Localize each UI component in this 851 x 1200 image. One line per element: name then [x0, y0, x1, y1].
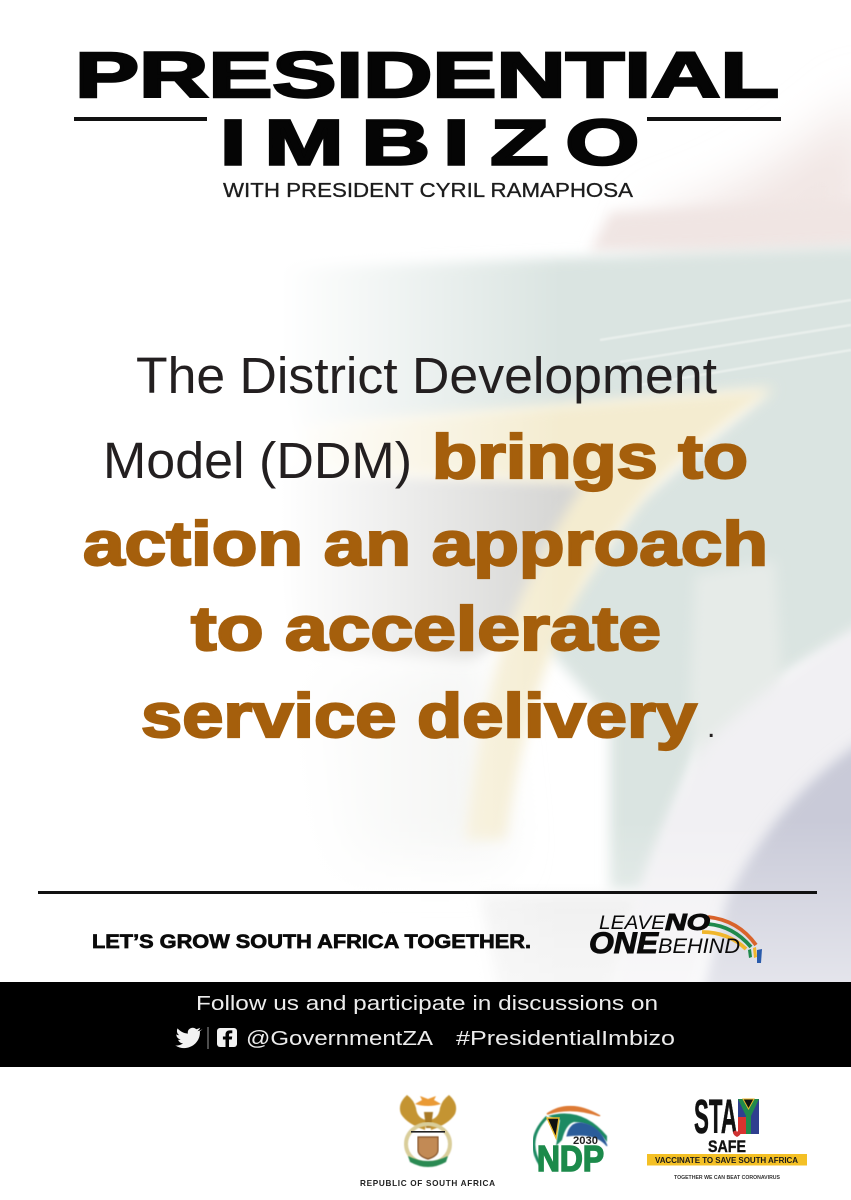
ndp orange arc: [547, 1106, 600, 1116]
logo: coat of arms: [360, 1095, 495, 1188]
crest wings: [400, 1095, 456, 1130]
ndp letters: NDP: [537, 1138, 604, 1179]
ndp black triangle: [547, 1118, 559, 1138]
highlight: brings to: brings to: [432, 423, 748, 492]
subtitle: WITH PRESIDENT CYRIL RAMAPHOSA: [223, 179, 633, 202]
band heading: Follow us and participate in discussions on: [196, 993, 658, 1015]
highlight: service delivery: service delivery: [141, 682, 698, 751]
footer divider: [38, 891, 817, 894]
crest motto ribbon: [408, 1156, 448, 1167]
stay heart: [733, 1130, 741, 1137]
crest laurel: [406, 1124, 450, 1164]
text line: The District Development: The District Development: [136, 347, 717, 404]
logo: NDP 2030: [534, 1106, 607, 1179]
logo words: NO: [665, 909, 710, 935]
handle: @GovernmentZA: [246, 1028, 434, 1050]
main message: [83, 347, 768, 751]
icon: facebook: [217, 1028, 237, 1047]
highlight: to accelerate: to accelerate: [191, 595, 661, 664]
stay flag Y: [738, 1099, 759, 1134]
ndp green ring: [534, 1117, 547, 1166]
logo words: [589, 909, 740, 960]
text line: Model (DDM): Model (DDM): [103, 432, 412, 489]
social band: [0, 982, 851, 1067]
together line: TOGETHER WE CAN BEAT CORONAVIRUS: [674, 1175, 780, 1181]
logo: Stay Safe: STA: [694, 1091, 737, 1144]
logo words: ONE: [589, 927, 659, 960]
logo words: BEHIND: [658, 935, 740, 958]
hashtag: #PresidentialImbizo: [456, 1028, 675, 1050]
highlight: action an approach: action an approach: [83, 510, 768, 579]
ndp green swoosh: [548, 1114, 607, 1146]
icon: twitter bird: [175, 1028, 203, 1048]
icon divider: [208, 1027, 209, 1049]
ndp year: 2030: [573, 1135, 598, 1147]
logo: Leave No One Behind: [589, 909, 762, 963]
title line: IMBIZO: IMBIZO: [220, 108, 639, 179]
slogan: LET’S GROW SOUTH AFRICA TOGETHER.: [92, 932, 531, 953]
crest shield: [418, 1137, 438, 1159]
safe word: SAFE: [708, 1137, 746, 1156]
crest sun: [415, 1096, 441, 1106]
ndp blue swoosh: [567, 1123, 607, 1146]
crest caption: REPUBLIC OF SOUTH AFRICA: [360, 1179, 495, 1188]
title: [75, 40, 779, 179]
crest spears: [411, 1131, 445, 1133]
logo rainbow arcs: [702, 917, 756, 949]
logo: Stay Safe: [647, 1091, 807, 1181]
vaccinate text: VACCINATE TO SAVE SOUTH AFRICA: [655, 1156, 798, 1165]
title line: PRESIDENTIAL: PRESIDENTIAL: [75, 40, 779, 111]
full stop: .: [707, 711, 715, 744]
title rule left: [74, 117, 207, 121]
logo flag ticks: [748, 947, 762, 963]
vaccinate banner: [647, 1154, 807, 1166]
title rule right: [647, 117, 781, 121]
logo words: LEAVE: [599, 913, 665, 934]
